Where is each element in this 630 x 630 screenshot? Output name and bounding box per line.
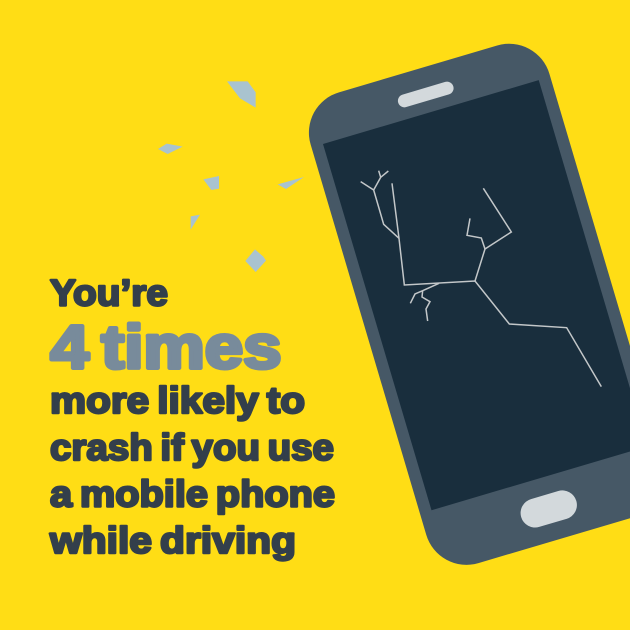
headline text	[49, 272, 335, 561]
line: while driving: while driving	[49, 520, 296, 561]
phone screen	[323, 80, 630, 510]
statistic: 4 times: 4 times	[50, 313, 282, 381]
line: a mobile phone: a mobile phone	[50, 474, 335, 514]
line: more likely to: more likely to	[50, 380, 305, 421]
phone body	[299, 34, 630, 575]
screen cracks	[361, 171, 601, 387]
line: You're: You’re	[50, 272, 168, 314]
icon: tilted smartphone	[299, 34, 630, 575]
speaker pill	[396, 80, 455, 109]
home button	[517, 487, 580, 531]
line: crash if you use: crash if you use	[50, 427, 334, 468]
icon: glass shards	[158, 81, 304, 272]
